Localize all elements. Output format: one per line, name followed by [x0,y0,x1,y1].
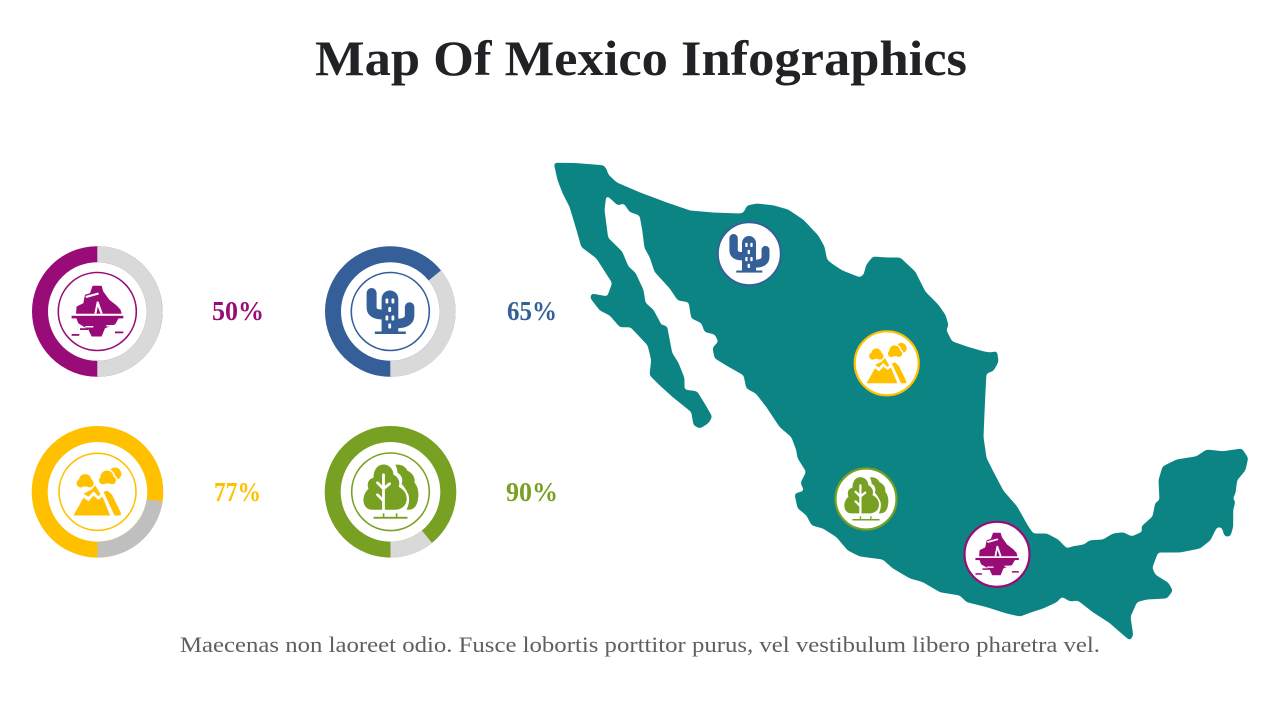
value: 50%: 50% [212,296,264,326]
map of Mexico [554,163,1248,640]
map marker: cactus [718,222,781,285]
caption text: Maecenas non laoreet odio. Fusce lobortis porttitor purus, vel vestibulum libero pharetra vel. [180,632,1100,657]
donut: iceberg 50% [40,254,155,369]
value: 77%: 77% [214,477,261,507]
map marker: tree [836,468,896,530]
value: 65%: 65% [507,296,557,326]
donut: cactus 65% [333,254,448,369]
value: 90%: 90% [506,477,558,507]
donut: mountain 77% [40,434,155,550]
map marker: mountain [855,331,919,395]
title: Map Of Mexico Infographics [315,30,967,86]
map marker: iceberg [964,522,1030,587]
donut: tree 90% [333,434,448,550]
